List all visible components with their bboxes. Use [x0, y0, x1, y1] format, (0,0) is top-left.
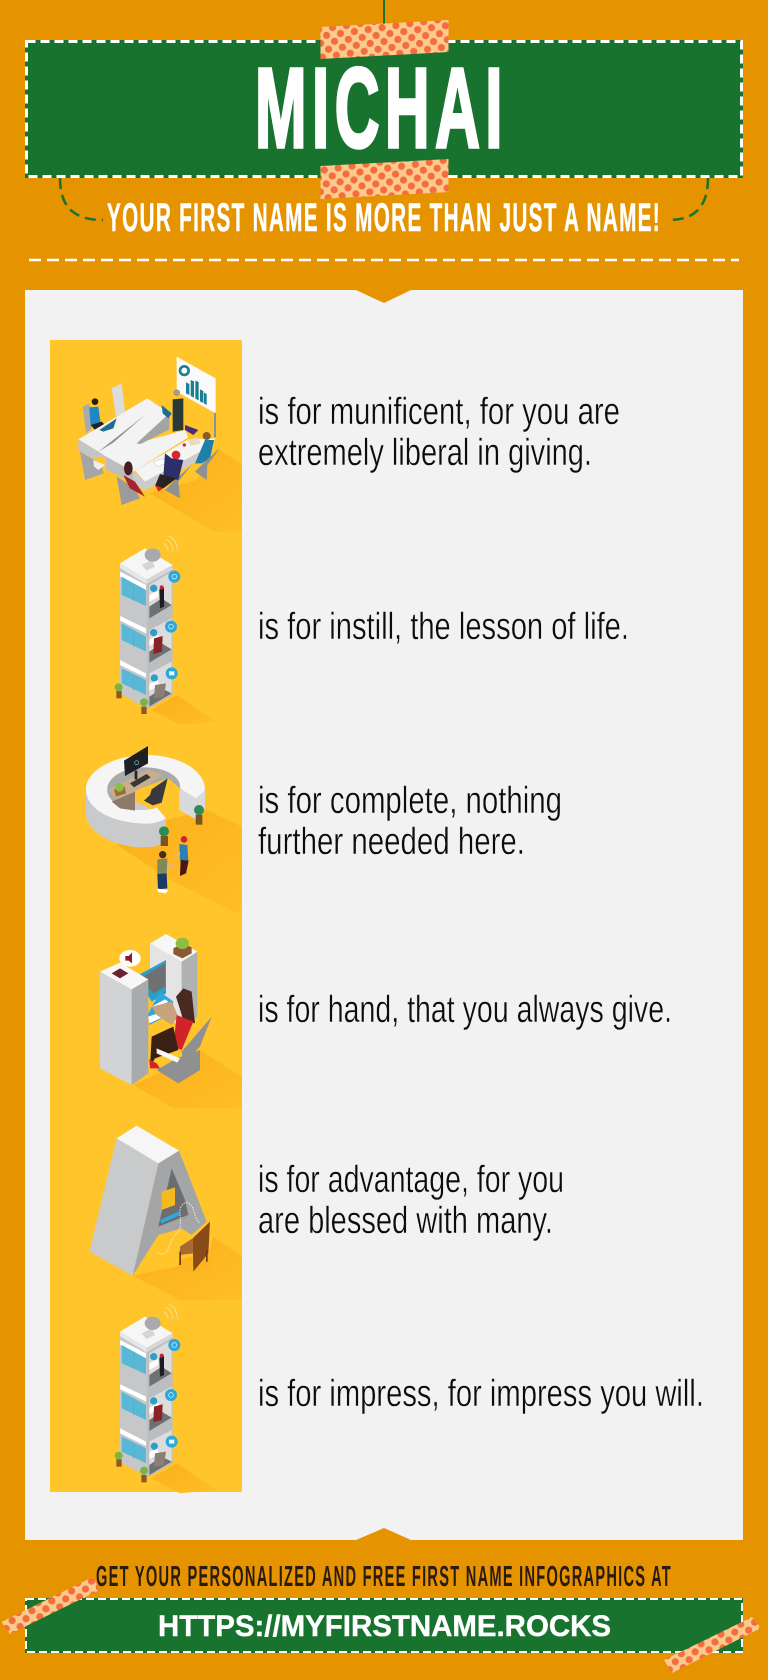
tape: footer left	[2, 1577, 100, 1634]
chair base	[157, 1050, 200, 1083]
text block: C	[258, 780, 562, 863]
panel: yellow illustration column	[50, 340, 242, 1492]
text block: M	[258, 391, 620, 474]
icon: letter M meeting table	[78, 357, 242, 532]
text block: A: is for advantage, for you	[258, 1159, 564, 1201]
tape: bottom	[320, 159, 448, 199]
text block: C: further needed here.	[258, 821, 525, 863]
title banner	[25, 20, 743, 199]
whiteboard	[177, 357, 216, 437]
text block: C: is for complete, nothing	[258, 780, 562, 822]
connector: left	[60, 178, 103, 220]
plant box	[173, 938, 192, 958]
desk	[148, 992, 173, 1025]
icon: letter C reception desk	[86, 746, 242, 915]
hanging string	[383, 0, 385, 24]
text block: M: is for munificent, for you are	[258, 391, 620, 433]
person: centre	[155, 451, 192, 498]
plants	[159, 805, 204, 846]
right table	[135, 438, 216, 482]
tape: top	[320, 20, 448, 59]
panel: content sheet	[25, 290, 743, 1540]
person: left woman	[117, 461, 145, 505]
person: right	[195, 432, 220, 480]
woman	[149, 988, 195, 1068]
icon: letter I tower repeat	[115, 1304, 217, 1493]
people talking	[157, 836, 189, 893]
person: top left	[89, 398, 104, 430]
footer banner	[25, 1598, 743, 1653]
chair	[178, 1222, 212, 1272]
text block: M: extremely liberal in giving.	[258, 432, 592, 474]
icon: letter I tower	[115, 536, 217, 725]
text block: I: is for instill, the lesson of life.	[258, 606, 629, 648]
speech bubble	[119, 950, 141, 967]
icon: letter A with desk	[89, 1126, 242, 1300]
icon: letter H cubicle	[100, 934, 242, 1108]
tape: footer right	[664, 1617, 761, 1673]
text block: A	[258, 1159, 564, 1242]
title: MICHAI	[255, 45, 508, 171]
person: standing	[173, 389, 198, 435]
connector: right	[669, 178, 708, 220]
footer URL: HTTPS://MYFIRSTNAME.ROCKS	[158, 1610, 611, 1643]
text block: A: are blessed with many.	[258, 1200, 553, 1242]
